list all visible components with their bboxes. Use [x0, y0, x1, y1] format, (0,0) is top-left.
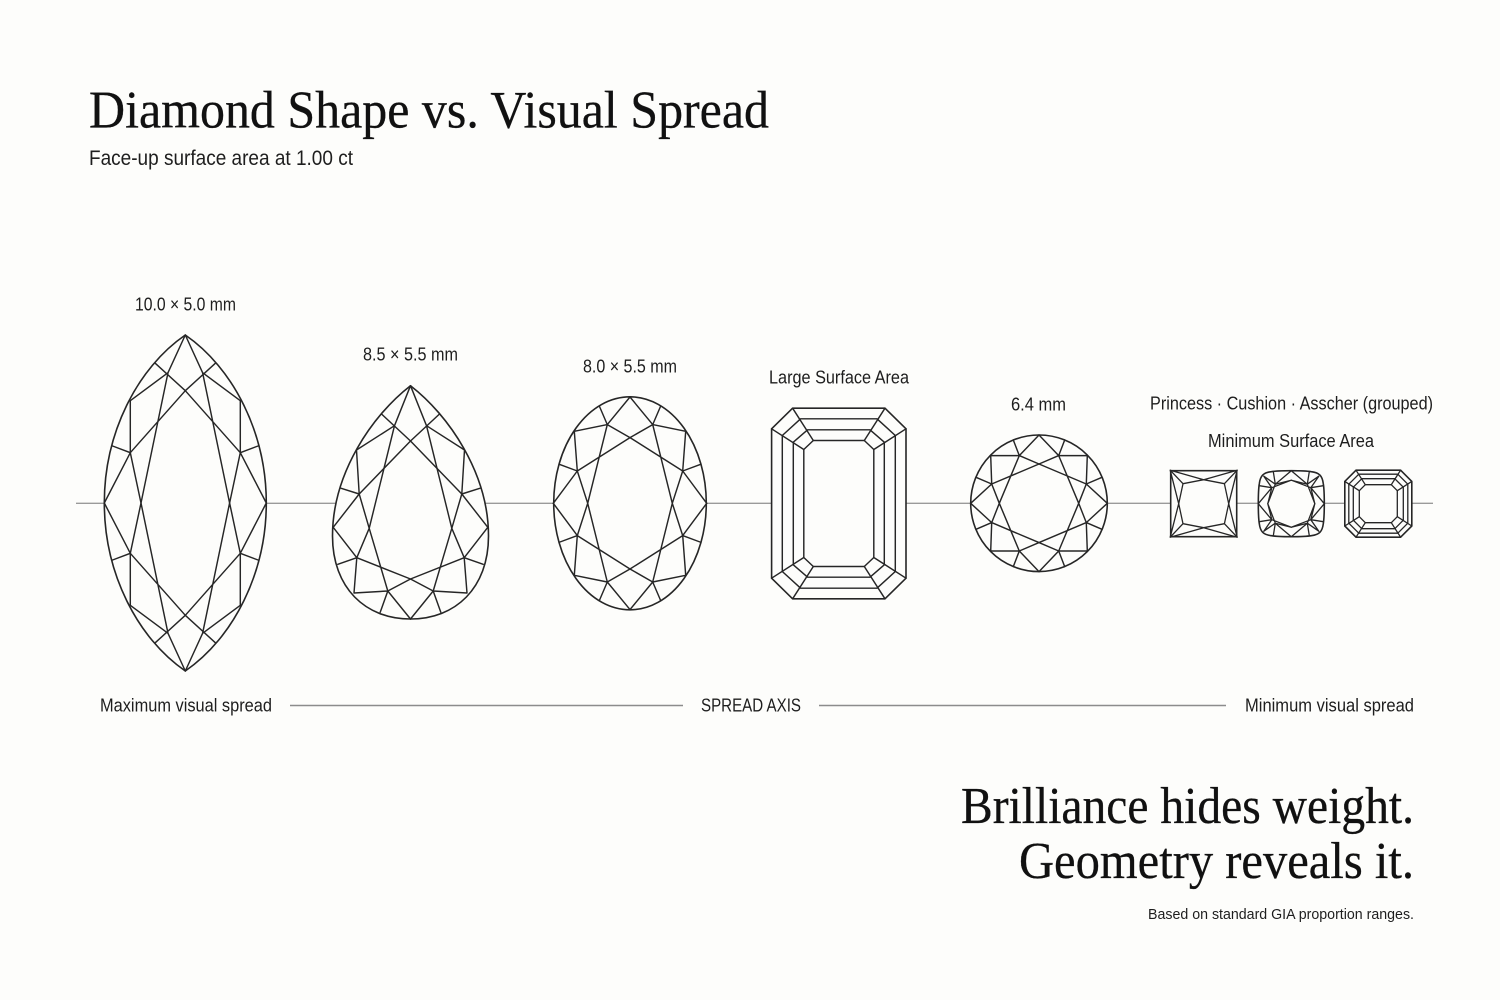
closing statement: Brilliance hides weight.	[961, 778, 1414, 835]
marquise dimension label: 10.0 × 5.0 mm	[135, 294, 236, 314]
asscher shape	[1345, 470, 1412, 537]
left spread axis rule	[290, 704, 683, 706]
source note: Based on standard GIA proportion ranges.	[1148, 906, 1414, 923]
grouped shapes label: Princess · Cushion · Asscher (grouped)	[1150, 392, 1433, 414]
round shape	[971, 435, 1107, 572]
closing statement	[961, 778, 1414, 890]
pear shape	[332, 386, 488, 619]
closing statement: Geometry reveals it.	[1019, 833, 1414, 890]
round dimension label: 6.4 mm	[1011, 394, 1066, 414]
marquise shape	[104, 335, 266, 671]
spread axis label: SPREAD AXIS	[701, 694, 801, 716]
minimum surface area label: Minimum Surface Area	[1208, 430, 1375, 451]
title: Diamond Shape vs. Visual Spread	[89, 82, 769, 140]
minimum visual spread label: Minimum visual spread	[1245, 694, 1414, 716]
emerald label: Large Surface Area	[769, 366, 910, 388]
oval shape	[553, 397, 707, 610]
princess shape	[1170, 470, 1237, 537]
emerald shape	[772, 408, 906, 599]
pear dimension label: 8.5 × 5.5 mm	[363, 344, 458, 364]
subtitle: Face-up surface area at 1.00 ct	[89, 146, 353, 170]
maximum visual spread label: Maximum visual spread	[100, 694, 272, 716]
cushion shape	[1258, 471, 1324, 537]
right spread axis rule	[819, 704, 1226, 706]
spread axis line through shapes	[76, 502, 1433, 504]
oval dimension label: 8.0 × 5.5 mm	[583, 356, 677, 376]
